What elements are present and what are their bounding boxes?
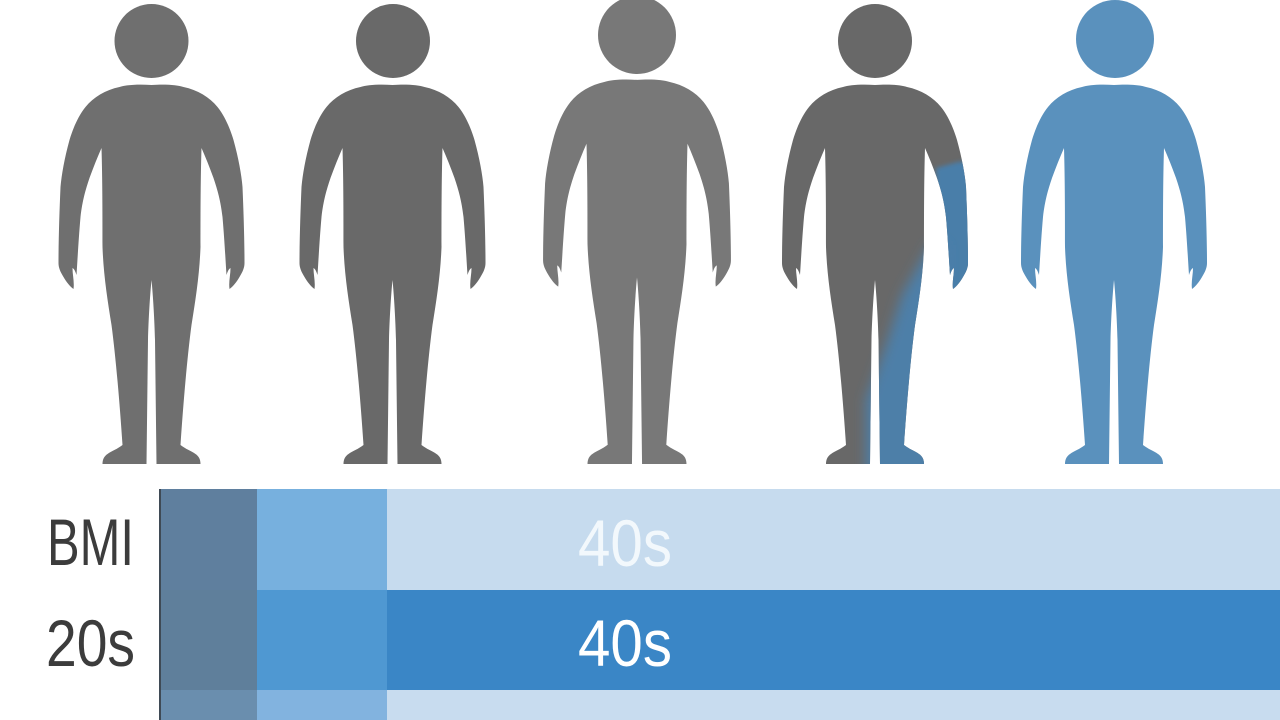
table row: 20s: 20s	[46, 606, 135, 680]
figure 2: gray silhouette	[300, 4, 486, 464]
table row: 20s: 40s	[578, 606, 672, 680]
figure 1: gray silhouette	[58, 4, 244, 464]
figure 5: blue silhouette	[1021, 0, 1207, 464]
table row: BMI: 40s	[578, 506, 672, 580]
table row: 30s (cropped by the frame)	[160, 690, 1280, 720]
table row: 20s	[46, 590, 1280, 690]
figure 4: gray silhouette with partial blue fill	[782, 4, 968, 464]
table row: BMI	[47, 489, 1280, 590]
table left axis line	[159, 489, 161, 720]
table row: BMI: BMI	[47, 505, 134, 579]
figure 3: lighter gray silhouette	[543, 0, 731, 464]
